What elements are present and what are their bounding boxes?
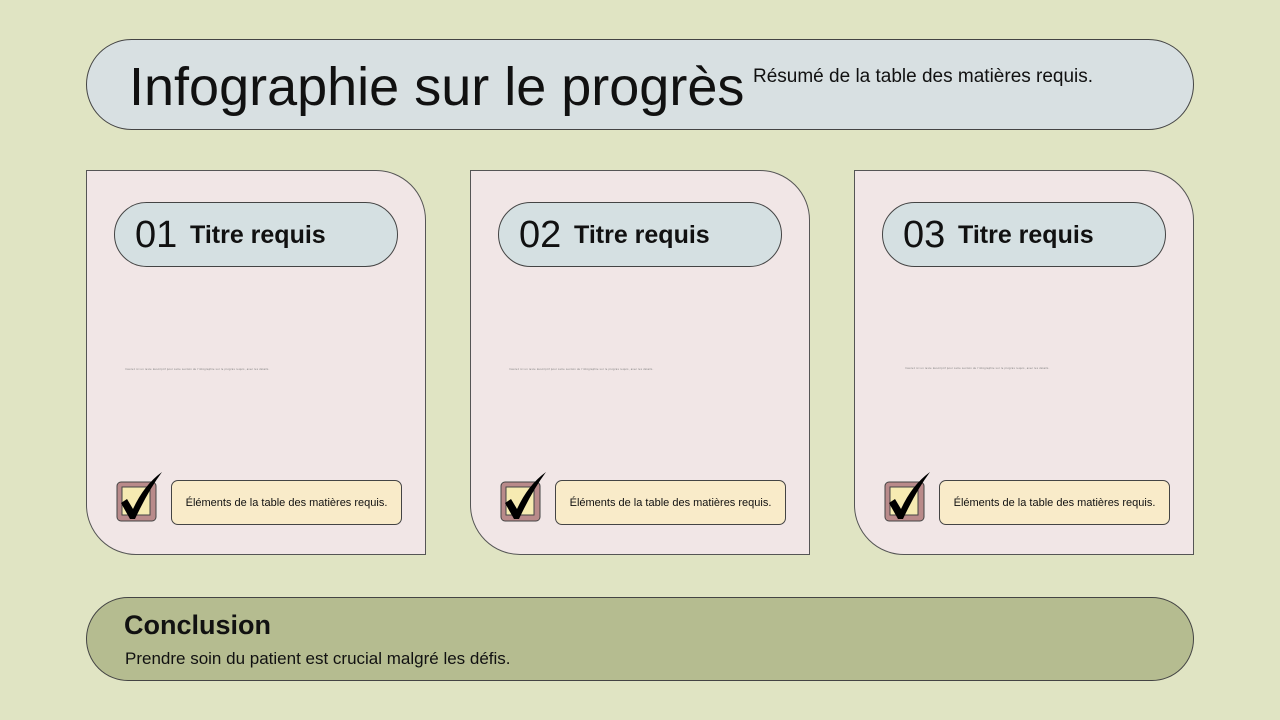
label 03: Éléments de la table des matières requis. [954,497,1155,509]
header banner [86,39,1194,130]
label 01: Éléments de la table des matières requis. [186,497,387,509]
label 03 [939,480,1170,525]
icon: checkbox 03 [884,472,930,522]
panel: card 01 [86,170,426,555]
heading pill 03: 03 [903,214,945,256]
heading pill 01 [114,202,398,267]
heading pill 01: 01 [135,214,177,256]
label 01 [171,480,402,525]
heading pill 03: Titre requis [958,221,1094,249]
panel: card 02 [470,170,810,555]
heading pill 02: 02 [519,214,561,256]
panel: card 03 [854,170,1194,555]
body text 03: Insérez ici un texte descriptif pour cette section de l'infographie sur le progrès requis, avec les détails. [905,367,1050,370]
conclusion heading: Conclusion [124,610,271,640]
icon: checkbox 02 [500,472,546,522]
heading pill 03 [882,202,1166,267]
panel: conclusion [86,597,1194,681]
label 02: Éléments de la table des matières requis. [570,497,771,509]
subtitle: Résumé de la table des matières requis. [753,66,1093,87]
heading pill 02 [498,202,782,267]
body text 02: Insérez ici un texte descriptif pour cette section de l'infographie sur le progrès requis, avec les détails. [509,368,654,371]
heading pill 01: Titre requis [190,221,326,249]
body text 01: Insérez ici un texte descriptif pour cette section de l'infographie sur le progrès requis, avec les détails. [125,368,270,371]
title: Infographie sur le progrès [129,57,744,117]
icon: checkbox 01 [116,472,162,522]
label 02 [555,480,786,525]
heading pill 02: Titre requis [574,221,710,249]
conclusion text: Prendre soin du patient est crucial malgré les défis. [125,649,511,668]
